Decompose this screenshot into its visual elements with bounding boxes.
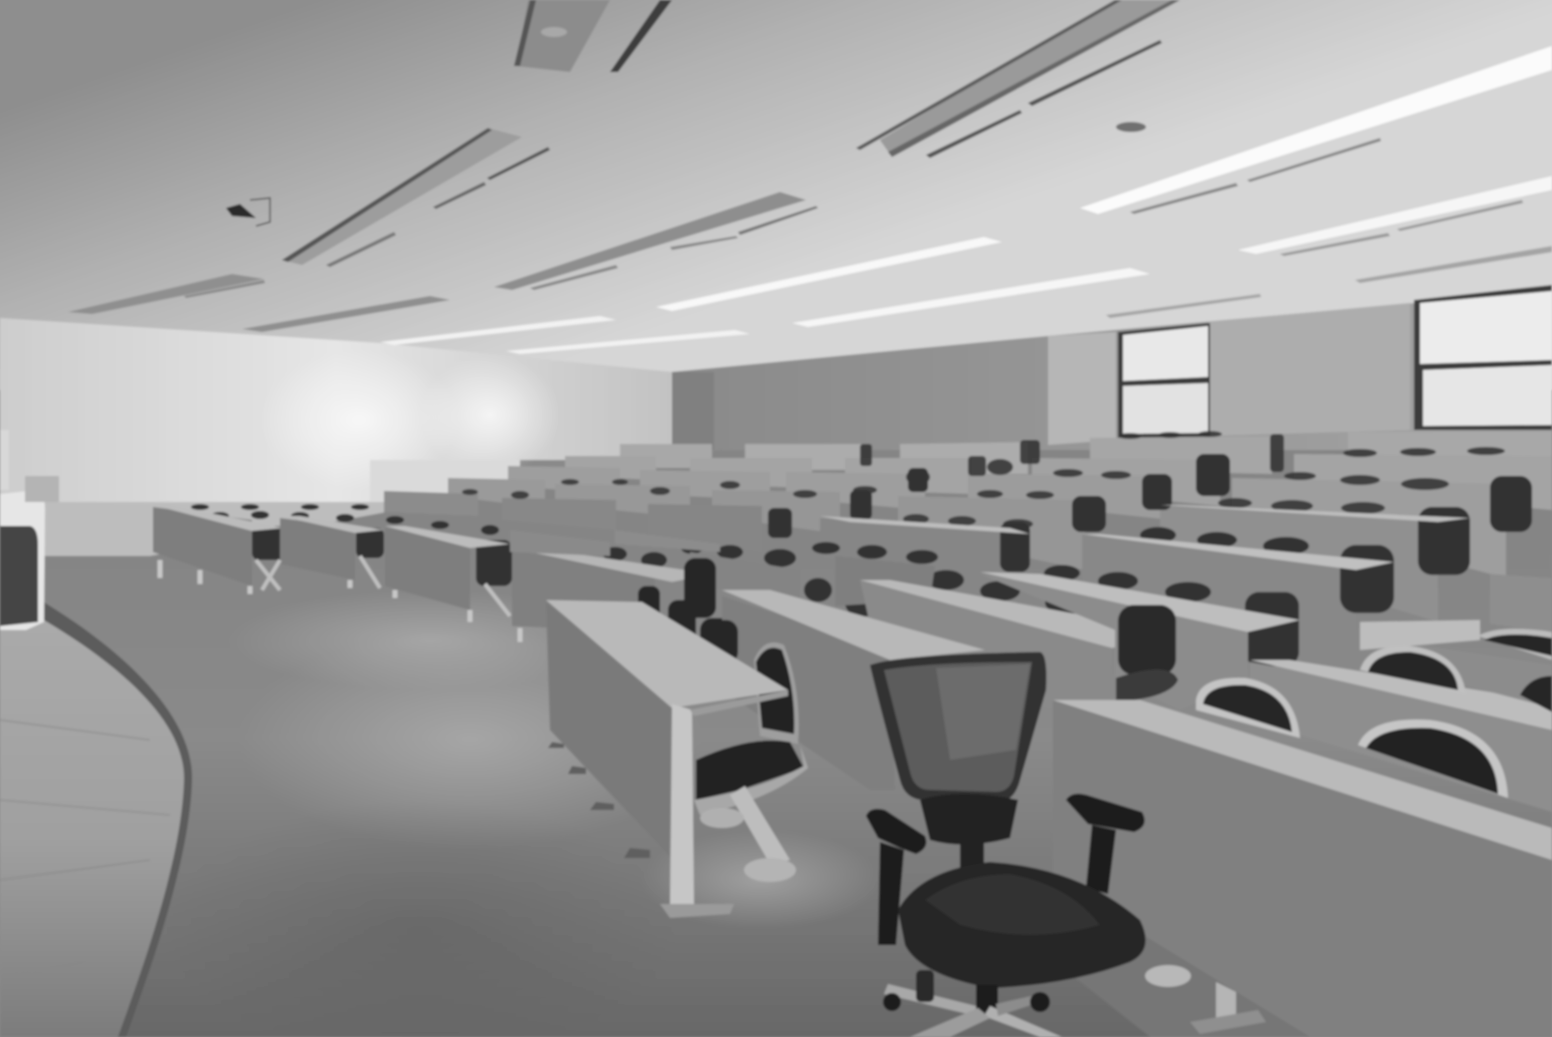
desk: row D bbox=[980, 574, 1248, 710]
light strips bbox=[1080, 46, 1552, 214]
desk: far right row bbox=[1388, 640, 1552, 708]
fixture: top slot bbox=[516, 0, 610, 72]
chair: mesh back bbox=[870, 652, 1046, 802]
desk: right row E bbox=[1250, 662, 1552, 812]
ceiling fixtures bbox=[68, 0, 1552, 354]
far desk rows bbox=[191, 431, 1552, 668]
desk row 1 bbox=[153, 507, 252, 586]
chair: right arm bbox=[1066, 794, 1145, 894]
chair: second desk seats bbox=[704, 620, 799, 744]
chair: seat bbox=[898, 862, 1146, 988]
office chair foreground bbox=[866, 652, 1146, 1037]
left desk rows bbox=[153, 505, 1470, 664]
fixture: left vent bbox=[282, 128, 522, 265]
desk: row C bbox=[860, 580, 1112, 708]
seats, left middle bbox=[638, 558, 738, 664]
stage platform bbox=[0, 594, 192, 1037]
front desk left aisle bbox=[546, 590, 985, 918]
desk: large foreground right bbox=[1053, 700, 1552, 1037]
row: mid seats, far bbox=[191, 431, 1532, 666]
chair: stem back bbox=[960, 835, 984, 875]
window: right bbox=[1414, 285, 1552, 430]
ceiling bbox=[0, 0, 1552, 390]
desk row: mid band bbox=[615, 530, 720, 552]
desk: second row bbox=[722, 596, 895, 790]
chair: left arm bbox=[866, 809, 926, 945]
desk: front left bbox=[546, 602, 673, 860]
fixture: centre vent bbox=[494, 192, 806, 290]
desk row 3 bbox=[385, 528, 470, 610]
lectern bbox=[0, 430, 59, 630]
seat under front desk bbox=[696, 740, 804, 800]
floor bbox=[0, 450, 1552, 1037]
front wall with spotlights bbox=[0, 318, 672, 556]
row: back rows right bbox=[1348, 432, 1552, 456]
right desks foreground bbox=[860, 572, 1552, 812]
desk row 4 bbox=[512, 550, 655, 632]
desk row 2 bbox=[280, 518, 355, 580]
fixture: projector bbox=[226, 198, 270, 226]
back wall with windows bbox=[672, 285, 1552, 450]
fixture: top right vent bbox=[880, 0, 1180, 157]
window: middle bbox=[1118, 323, 1210, 438]
fixture: far-left vents bbox=[68, 274, 264, 314]
seat: row D chair bbox=[1116, 669, 1178, 702]
chair: base bbox=[883, 970, 1062, 1037]
seats, right bbox=[1196, 629, 1552, 798]
chair back bbox=[1118, 605, 1176, 675]
chair: lumbar bbox=[920, 794, 1018, 845]
